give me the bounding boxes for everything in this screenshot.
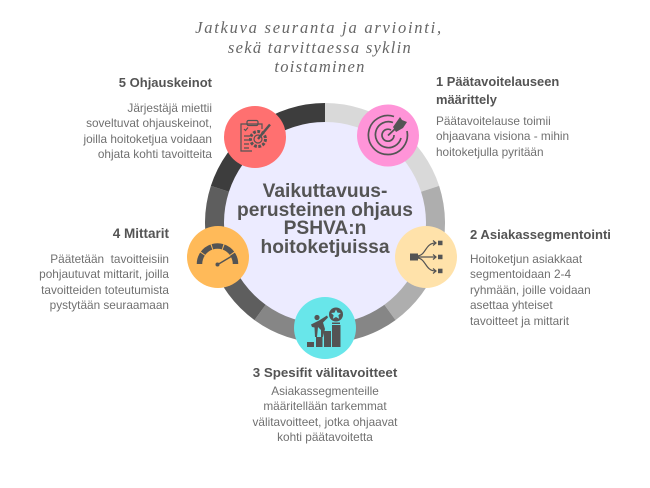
icon: branching arrows on yellow circle xyxy=(395,226,457,288)
step 1 text: Päätavoitelause toimii ohjaavana visiona - mihin hoitoketjulla pyritään xyxy=(436,114,569,159)
ring segments xyxy=(214,112,436,334)
step 5 text: Järjestäjä miettii soveltuvat ohjauskeinot, joilla hoitoketjua voidaan ohjata kohti tavoitteita xyxy=(83,101,212,161)
handwritten title: Jatkuva seuranta ja arviointi, sekä tarvittaessa syklin toistaminen xyxy=(195,18,443,76)
step 4 text: 4 Mittarit xyxy=(113,226,169,241)
step 2 text: Hoitoketjun asiakkaat segmentoidaan 2-4 ryhmään, joille voidaan asettaa yhteiset tavoitteet ja mittarit xyxy=(470,252,591,328)
step 2 text: 2 Asiakassegmentointi xyxy=(470,227,611,242)
step 2 text xyxy=(470,227,611,328)
step 3 text: Asiakassegmenteille määritellään tarkemmat välitavoitteet, jotka ohjaavat kohti päätavoitetta xyxy=(253,384,397,444)
step 1 text xyxy=(436,74,569,159)
icon: target on pink circle xyxy=(357,104,419,166)
central disc xyxy=(223,121,427,325)
centre heading: Vaikuttavuus- perusteinen ohjaus PSHVA:n hoitoketjuissa xyxy=(237,181,413,258)
step 4 text xyxy=(39,226,169,312)
icon: speedometer on orange circle xyxy=(187,226,249,288)
step 5 text: 5 Ohjauskeinot xyxy=(119,75,212,90)
step 5 text xyxy=(83,75,212,161)
icon: clipboard and gear on red circle xyxy=(224,106,286,168)
step 3 text: 3 Spesifit välitavoitteet xyxy=(253,365,397,380)
icon: climbing figure and stair chart on cyan circle xyxy=(294,297,356,359)
step 4 text: Päätetään tavoitteisiin pohjautuvat mittarit, joilla tavoitteiden toteutumista pystytään seuraamaan xyxy=(39,252,169,312)
step 1 text: 1 Päätavoitelauseen määrittely xyxy=(436,74,559,107)
